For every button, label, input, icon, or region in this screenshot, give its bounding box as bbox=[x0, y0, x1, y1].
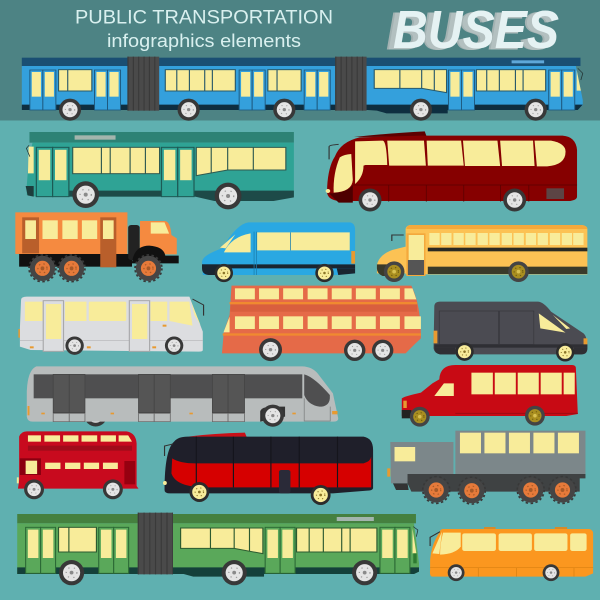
red minibus bbox=[402, 365, 578, 427]
orange double-decker bbox=[222, 286, 421, 361]
header band bbox=[0, 0, 600, 120]
title bbox=[75, 6, 333, 51]
grey army truck bus bbox=[387, 431, 585, 504]
dark grey van bbox=[434, 302, 587, 362]
yellow school bus bbox=[377, 225, 587, 282]
maroon coach bbox=[326, 131, 577, 211]
heading: BUSES: BUSES bbox=[388, 2, 554, 62]
orange bus bbox=[430, 527, 593, 581]
title: PUBLIC TRANSPORTATION bbox=[75, 6, 333, 28]
title: infographics elements bbox=[107, 30, 301, 51]
white bus bbox=[18, 297, 204, 355]
orange off-road truck bus bbox=[15, 212, 179, 282]
small red double-decker bbox=[17, 431, 139, 499]
blue van bbox=[202, 222, 355, 282]
black and red coach bbox=[163, 433, 373, 505]
long silver bus bbox=[27, 366, 338, 427]
teal bus bbox=[26, 132, 294, 209]
green articulated bus bbox=[17, 513, 419, 585]
heading: BUSES: BUSES bbox=[386, 2, 552, 62]
blue articulated bus bbox=[22, 57, 583, 121]
heading: BUSES: BUSES bbox=[393, 0, 559, 60]
